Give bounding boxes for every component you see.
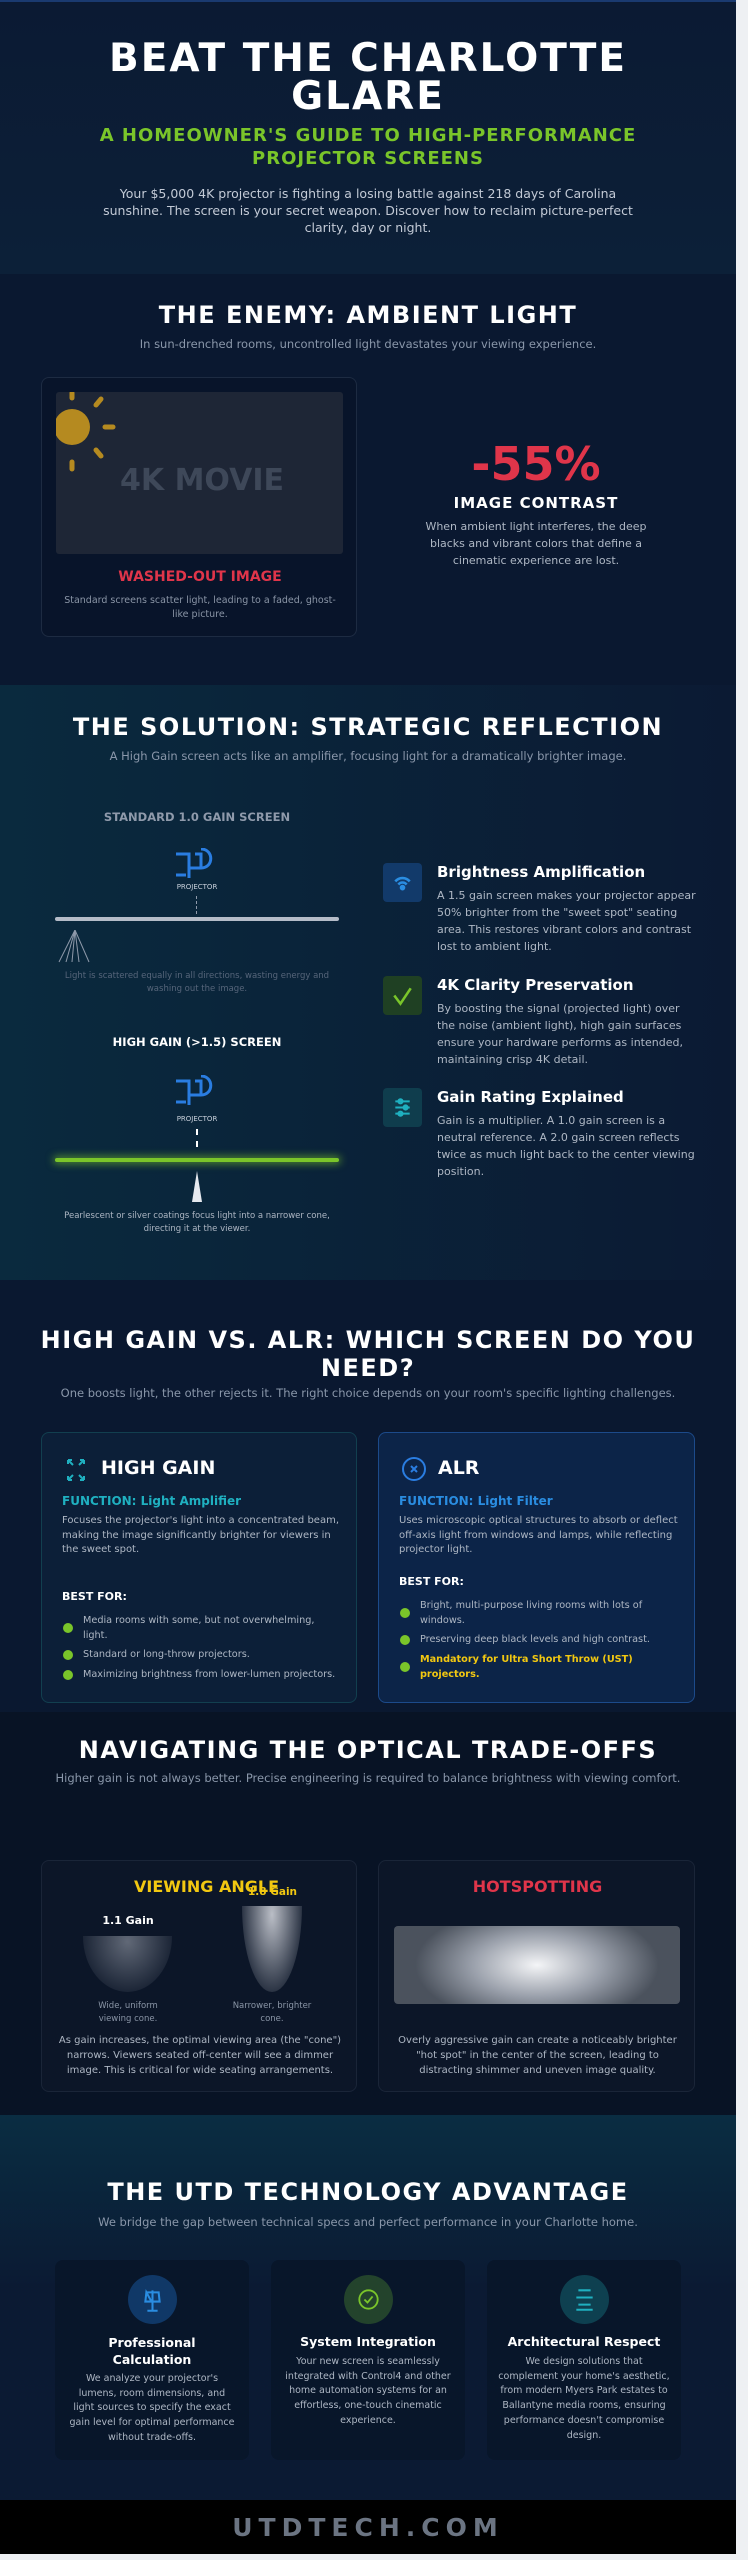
heading: THE UTD TECHNOLOGY ADVANTAGE xyxy=(107,2178,629,2206)
card: high gain: Standard or long-throw projectors. xyxy=(83,1649,250,1660)
feature: gain rating: Gain is a multiplier. A 1.0 gain screen is a neutral reference. A 2.0 gain screen reflects twice as much light back to the center viewing position. xyxy=(437,1114,695,1178)
card: high gain: Focuses the projector's light into a concentrated beam, making the image significantly brighter for viewers in the sweet spot. xyxy=(62,1515,339,1555)
card: hotspotting: Overly aggressive gain can create a noticeably brighter "hot spot" in the center of the screen, leading to distracting shimmer and uneven image quality. xyxy=(398,2035,677,2076)
card: viewing angle: Narrower, brighter xyxy=(233,2001,311,2011)
card: viewing angle: cone. xyxy=(260,2014,284,2024)
card: ALR xyxy=(378,1432,695,1703)
card: viewing angle: As gain increases, the optimal viewing area (the "cone") narrows. Viewers seated off-center will see a dimmer image. This is critical for wide seating arrangements. xyxy=(59,2035,341,2076)
icon: projector xyxy=(176,1075,212,1105)
subheading: In sun-drenched rooms, uncontrolled light devastates your viewing experience. xyxy=(140,337,596,351)
card: ALR: FUNCTION: Light Filter xyxy=(399,1494,553,1508)
card: viewing angle xyxy=(41,1860,357,2092)
stat: -55%: When ambient light interferes, the deep blacks and vibrant colors that define a cinematic experience are lost. xyxy=(425,520,647,567)
subheading: One boosts light, the other rejects it. The right choice depends on your room's specific lighting challenges. xyxy=(61,1386,675,1400)
hotspot screen xyxy=(394,1926,680,2004)
card: system integration: System Integration xyxy=(300,2334,436,2349)
card: washed-out image xyxy=(41,377,357,637)
card: system integration: Your new screen is seamlessly integrated with Control4 and other home automation systems for an effortless, one-touch cinematic experience. xyxy=(285,2356,451,2426)
stat: -55%: -55% xyxy=(471,437,601,491)
subheading: We bridge the gap between technical specs and perfect performance in your Charlotte home. xyxy=(98,2215,638,2229)
focused beam xyxy=(192,1171,202,1202)
card: high gain: BEST FOR: xyxy=(62,1590,127,1603)
icon: filter xyxy=(402,1457,426,1481)
title xyxy=(109,36,627,119)
feature: clarity: 4K Clarity Preservation xyxy=(437,976,634,994)
card: ALR: Mandatory for Ultra Short Throw (UST) projectors. xyxy=(420,1654,633,1680)
footer: UTDTECH.COM xyxy=(232,2513,504,2542)
card: architectural respect: We design solutions that complement your home's aesthetic, from modern Myers Park estates to Ballantyne media rooms, ensuring performance doesn't compromise design. xyxy=(498,2356,670,2441)
stat: -55%: IMAGE CONTRAST xyxy=(454,494,618,512)
title: BEAT THE CHARLOTTE xyxy=(109,36,627,81)
intro text: Your $5,000 4K projector is fighting a losing battle against 218 days of Carolina sunshine. The screen is your secret weapon. Discover how to reclaim picture-perfect clarity, day or night. xyxy=(103,186,633,235)
card: hotspotting xyxy=(378,1860,695,2092)
heading: HIGH GAIN VS. ALR: WHICH SCREEN DO YOU NEED? xyxy=(41,1326,695,1382)
card: ALR: Preserving deep black levels and high contrast. xyxy=(420,1634,650,1645)
diagram: standard screen: PROJECTOR xyxy=(177,883,217,891)
card: ALR: Bright, multi-purpose living rooms with lots of windows. xyxy=(420,1600,642,1626)
card: high gain: FUNCTION: Light Amplifier xyxy=(62,1494,241,1508)
feature: gain rating: Gain Rating Explained xyxy=(437,1088,624,1106)
section: enemy xyxy=(0,274,736,685)
heading: NAVIGATING THE OPTICAL TRADE-OFFS xyxy=(79,1736,657,1764)
stat: -55% xyxy=(425,437,647,567)
heading: THE ENEMY: AMBIENT LIGHT xyxy=(159,301,577,329)
subtitle xyxy=(100,125,636,169)
title: GLARE xyxy=(291,74,445,119)
card: professional calculation: Calculation xyxy=(113,2352,191,2367)
feature: brightness: A 1.5 gain screen makes your projector appear 50% brighter from the "sweet spot" seating area. This restores vibrant colors and contrast lost to ambient light. xyxy=(437,889,696,953)
section: high gain vs ALR xyxy=(0,1280,736,1712)
card: viewing angle: Wide, uniform xyxy=(98,2001,158,2011)
card: viewing angle: viewing cone. xyxy=(99,2014,157,2024)
footer xyxy=(0,2500,736,2554)
diagram: high gain screen: HIGH GAIN (>1.5) SCREEN xyxy=(113,1035,281,1049)
card: professional calculation: Professional xyxy=(108,2335,196,2350)
card: professional calculation: We analyze your projector's lumens, room dimensions, and light sources to specify the exact gain level for optimal performance without trade-offs. xyxy=(69,2373,234,2443)
diagram: high gain screen: PROJECTOR xyxy=(177,1115,217,1123)
section: UTD advantage xyxy=(0,2115,736,2500)
card: ALR: Uses microscopic optical structures to absorb or deflect off-axis light from windows and lamps, while reflecting projector light. xyxy=(399,1515,678,1555)
icon: expand xyxy=(67,1459,85,1481)
card: viewing angle: 1.8 Gain xyxy=(248,1886,297,1898)
card: architectural respect xyxy=(487,2260,681,2460)
subheading: A High Gain screen acts like an amplifier, focusing light for a dramatically brighter image. xyxy=(110,749,626,763)
screen bar xyxy=(55,917,339,921)
feature: brightness xyxy=(383,863,696,953)
card: hotspotting: HOTSPOTTING xyxy=(473,1877,602,1896)
section: solution xyxy=(0,685,736,1280)
feature: gain rating xyxy=(383,1088,695,1178)
icon: projector xyxy=(176,848,212,878)
card: ALR: ALR xyxy=(438,1457,479,1479)
card: ALR: BEST FOR: xyxy=(399,1575,464,1588)
card: high gain: Maximizing brightness from lower-lumen projectors. xyxy=(83,1669,335,1680)
scatter rays xyxy=(58,930,90,962)
diagram: standard screen: Light is scattered equally in all directions, wasting energy and washing out the image. xyxy=(65,971,329,994)
caption: Standard screens scatter light, leading to a faded, ghost-like picture. xyxy=(64,595,336,620)
diagram: high gain screen: Pearlescent or silver coatings focus light into a narrower cone, directing it at the viewer. xyxy=(64,1211,330,1234)
feature: clarity xyxy=(383,976,683,1066)
screen xyxy=(56,392,343,554)
cone 1.1 xyxy=(83,1936,172,1992)
icon: sun xyxy=(56,392,116,472)
cone 1.8 xyxy=(242,1906,302,1992)
diagram: high gain screen xyxy=(50,1035,344,1234)
text: 4K movie: 4K MOVIE xyxy=(120,463,284,498)
glowing screen bar xyxy=(55,1158,339,1162)
card: architectural respect: Architectural Respect xyxy=(508,2334,660,2349)
subtitle: PROJECTOR SCREENS xyxy=(252,148,484,169)
label: WASHED-OUT IMAGE xyxy=(118,569,282,585)
section: trade-offs xyxy=(0,1712,736,2115)
header section xyxy=(0,0,736,274)
card: high gain: Media rooms with some, but not overwhelming, light. xyxy=(83,1615,314,1641)
diagram: standard screen xyxy=(55,810,339,994)
diagram: standard screen: STANDARD 1.0 GAIN SCREEN xyxy=(104,810,290,824)
feature: clarity: By boosting the signal (projected light) over the noise (ambient light), high gain surfaces ensure your hardware performs as intended, maintaining crisp 4K detail. xyxy=(437,1002,683,1066)
subheading: Higher gain is not always better. Precise engineering is required to balance brightness with viewing comfort. xyxy=(56,1771,680,1785)
card: viewing angle: 1.1 Gain xyxy=(102,1914,154,1927)
card: professional calculation xyxy=(55,2260,249,2460)
card: system integration xyxy=(271,2260,465,2460)
feature: brightness: Brightness Amplification xyxy=(437,863,645,881)
subtitle: A HOMEOWNER'S GUIDE TO HIGH-PERFORMANCE xyxy=(100,125,636,146)
card: high gain xyxy=(41,1432,357,1703)
card: high gain: HIGH GAIN xyxy=(101,1457,215,1479)
card: viewing angle: VIEWING ANGLE xyxy=(134,1877,279,1896)
heading: THE SOLUTION: STRATEGIC REFLECTION xyxy=(73,713,663,741)
